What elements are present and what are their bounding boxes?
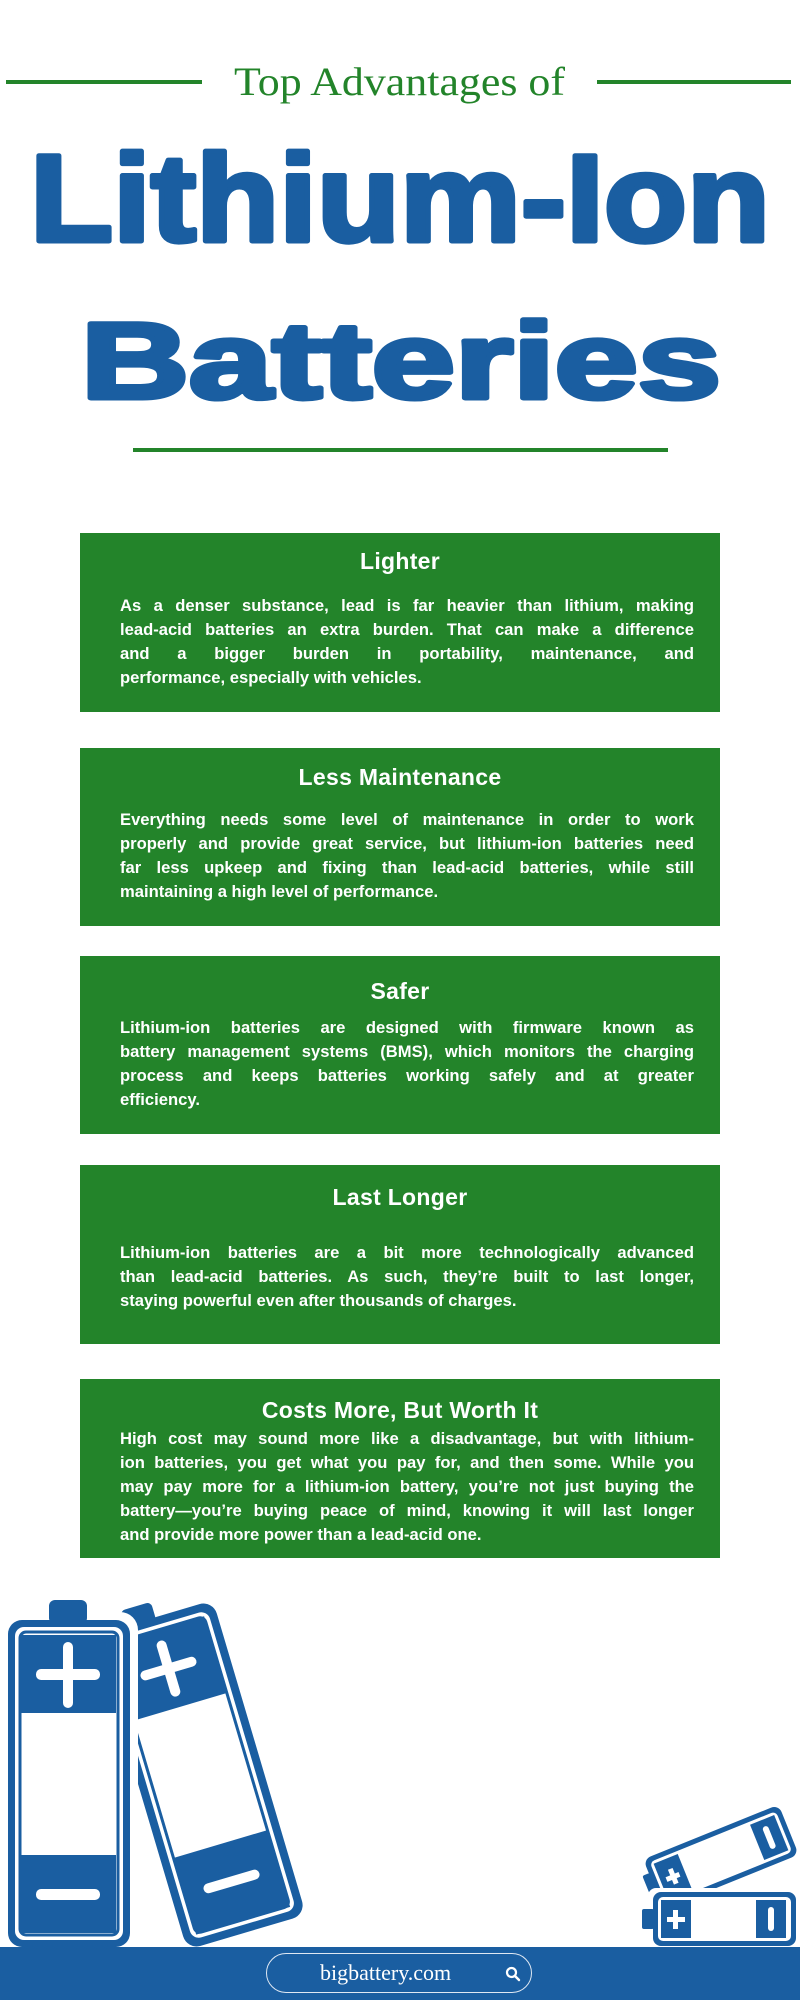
panel: Lighter: lead-acid batteries an extra burden. That can make a difference (120, 620, 694, 639)
icon: search (506, 1966, 520, 1982)
icon: tilted battery (89, 1585, 306, 1950)
illustration: batteries (8, 1600, 796, 1947)
main title: Lithium-Ion: Lithium-Ion (30, 130, 770, 268)
panel: Less Maintenance (80, 748, 720, 926)
panel: Safer: Safer (370, 978, 430, 1004)
panel: Last Longer: Last Longer (333, 1184, 467, 1210)
main title: Batteries: Batteries (81, 300, 721, 421)
panel: Costs More, But Worth It: Costs More, But Worth It (262, 1397, 538, 1423)
subtitle: Top Advantages of (6, 59, 791, 104)
panel: Safer: process and keeps batteries working safely and at greater (120, 1066, 694, 1085)
panel: Last Longer: than lead-acid batteries. As such, they’re built to last longer, (120, 1267, 694, 1286)
icon: small horizontal battery (642, 1888, 800, 1950)
panel: Last Longer (80, 1165, 720, 1344)
panel: Lighter: performance, especially with vehicles. (120, 668, 422, 687)
panel: Less Maintenance: properly and provide great service, but lithium-ion batteries need (120, 834, 694, 853)
footer bar (0, 1947, 800, 2000)
panel: Last Longer: Lithium-ion batteries are a bit more technologically advanced (120, 1243, 694, 1262)
panel: Lighter: Lighter (360, 548, 440, 574)
panel: Lighter: As a denser substance, lead is far heavier than lithium, making (120, 596, 694, 615)
panel: Safer: efficiency. (120, 1090, 200, 1109)
panel: Costs More, But Worth It (80, 1379, 720, 1558)
panel: Safer (80, 956, 720, 1134)
panel: Lighter (80, 533, 720, 712)
panel: Less Maintenance: maintaining a high level of performance. (120, 882, 438, 901)
panel: Costs More, But Worth It: ion batteries, you get what you pay for, and then some. While you (120, 1453, 694, 1472)
panel: Last Longer: staying powerful even after thousands of charges. (120, 1291, 516, 1310)
footer: website pill: bigbattery.com (320, 1960, 451, 1985)
panel: Less Maintenance: Less Maintenance (299, 764, 501, 790)
icon: small tilted battery (637, 1805, 799, 1912)
panel: Safer: Lithium-ion batteries are designed with firmware known as (120, 1018, 694, 1037)
panel: Costs More, But Worth It: High cost may sound more like a disadvantage, but with lithium- (120, 1429, 694, 1448)
panel: Less Maintenance: Everything needs some level of maintenance in order to work (120, 810, 694, 829)
panel: Costs More, But Worth It: battery—you’re buying peace of mind, knowing it will last longer (120, 1501, 694, 1520)
subtitle: Top Advantages of: Top Advantages of (234, 59, 566, 104)
panel: Safer: battery management systems (BMS), which monitors the charging (120, 1042, 694, 1061)
footer: website pill (266, 1953, 532, 1993)
panel: Costs More, But Worth It: and provide more power than a lead-acid one. (120, 1525, 481, 1544)
panel: Less Maintenance: far less upkeep and fixing than lead-acid batteries, while still (120, 858, 694, 877)
panel: Lighter: and a bigger burden in portability, maintenance, and (120, 644, 694, 663)
icon: upright battery (0, 1600, 138, 1954)
header title (6, 59, 791, 452)
panel: Costs More, But Worth It: may pay more for a lithium-ion battery, you’re not just buying the (120, 1477, 694, 1496)
